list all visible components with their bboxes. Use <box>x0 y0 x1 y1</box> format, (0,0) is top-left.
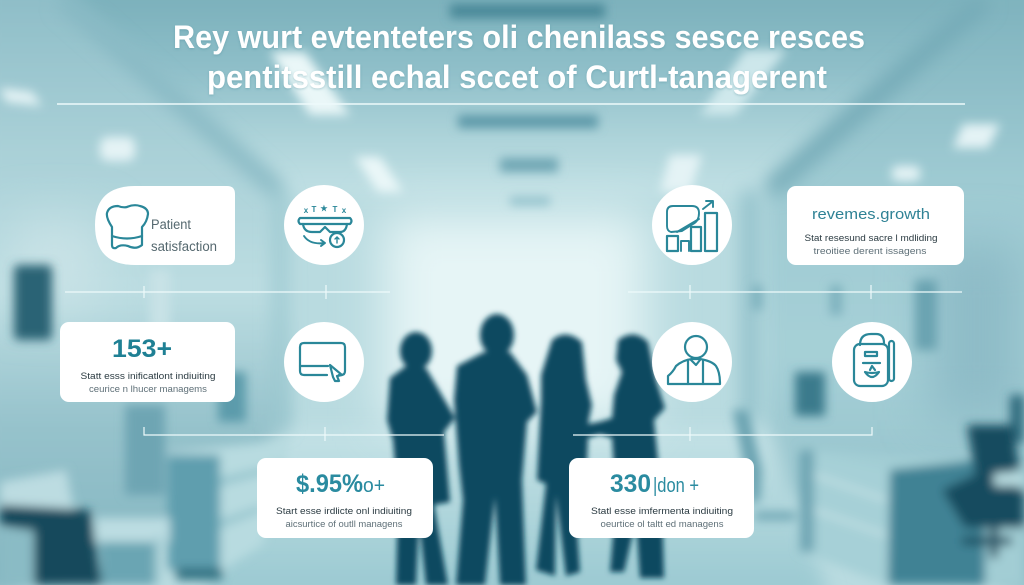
icon circle: medical bag <box>832 322 912 402</box>
icon circle: revenue growth chart <box>652 185 732 265</box>
icon circle: rating stars and gauge: x <box>304 206 309 215</box>
icon circle: rating stars and gauge: ★ <box>320 204 328 213</box>
card: 330 stat <box>569 458 754 538</box>
card: $.95% stat: $.95% <box>296 470 363 498</box>
person 2 <box>454 314 537 585</box>
card: 153+ staff stat: Statt esss inificatlont indiuiting <box>80 371 216 381</box>
card: $.95% stat: Start esse irdlicte onl indiuiting <box>276 506 412 516</box>
card: 330 stat: oeurtice ol taltt ed managens <box>600 519 724 529</box>
card: $.95% stat <box>257 458 433 538</box>
right desk <box>800 448 1024 585</box>
card: revenue growth: revemes.growth <box>812 206 930 223</box>
title: Rey wurt evtenteters oli chenilass sesce resces <box>173 19 865 55</box>
card: 153+ staff stat <box>60 322 235 402</box>
label <box>151 217 217 254</box>
label: satisfaction <box>151 239 217 254</box>
label: Patient <box>151 217 191 232</box>
icon circle: rating stars and gauge: T <box>312 205 317 214</box>
left desk <box>168 440 290 572</box>
card: revenue growth: treoitiee derent issagens <box>814 246 927 256</box>
icon circle: person in suit <box>652 322 732 402</box>
card: patient satisfaction <box>95 186 235 265</box>
card: 330 stat: 330 <box>610 470 651 498</box>
icon: chef hat <box>107 205 148 248</box>
card: 330 stat: |don + <box>653 475 699 497</box>
card: $.95% stat: aicsurtice of outll managens <box>286 519 403 529</box>
icon circle: rating stars and gauge: x <box>342 206 347 215</box>
card: 153+ staff stat: ceurice n lhucer managems <box>89 384 208 394</box>
card: revenue growth: Stat resesund sacre l mdliding <box>804 233 938 243</box>
title rule and connector lines <box>57 104 965 441</box>
silhouettes of four staff members <box>387 314 665 585</box>
card: $.95% stat: o+ <box>363 475 385 497</box>
right chair <box>967 425 1020 478</box>
card: 153+ staff stat: 153+ <box>112 335 172 363</box>
person 1 <box>387 332 455 585</box>
title: pentitsstill echal sccet of Curtl-tanagerent <box>207 59 827 95</box>
person 4 <box>596 334 665 578</box>
card: 330 stat: Statl esse imfermenta indiuiting <box>591 506 733 516</box>
card: revenue growth <box>787 186 964 265</box>
icon circle: rating stars and gauge: T <box>333 205 338 214</box>
person 3 <box>536 334 604 576</box>
icon circle: rating stars and gauge <box>284 185 364 265</box>
left chair and table <box>0 470 75 525</box>
title <box>173 19 865 95</box>
icon circle: screen with cursor <box>284 322 364 402</box>
